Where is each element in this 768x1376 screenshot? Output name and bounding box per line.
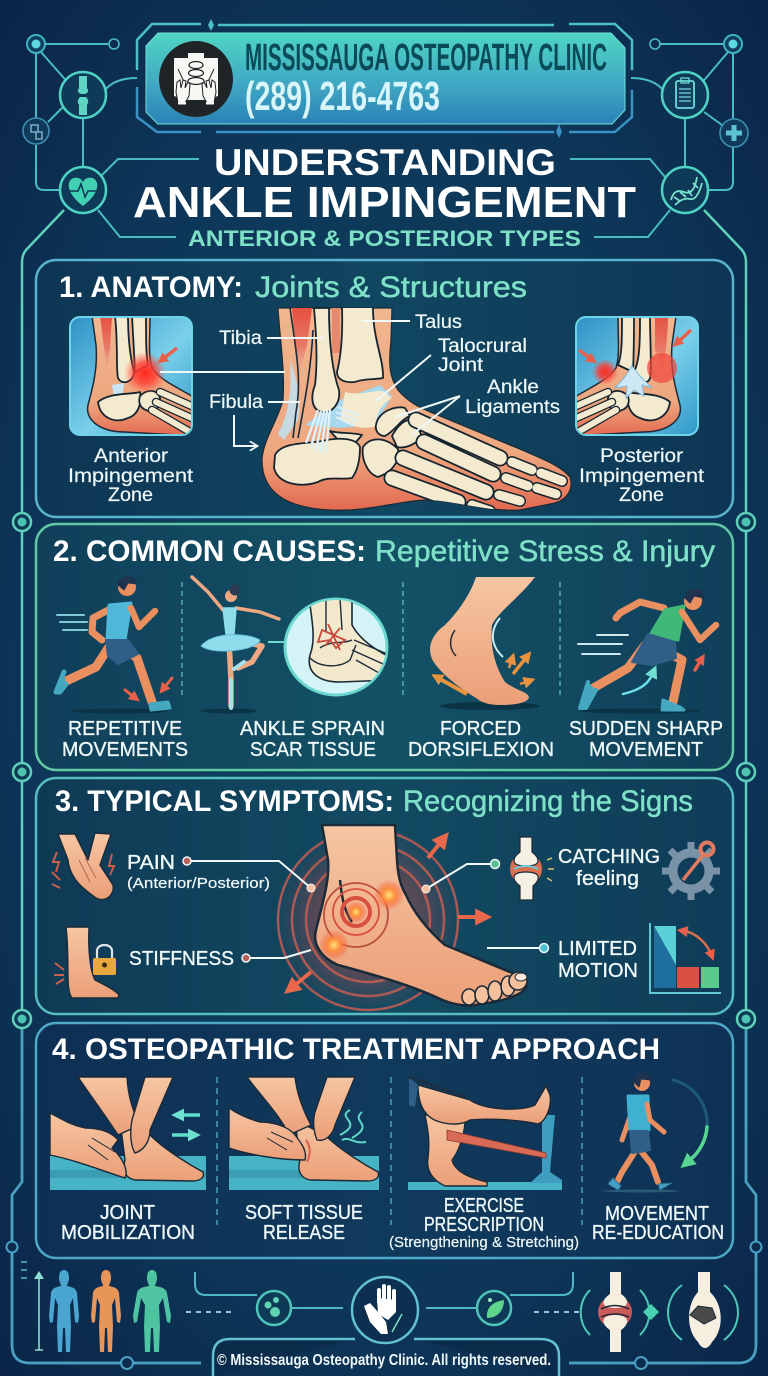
icon: small badge left <box>23 118 49 144</box>
cause labels: REPETITIVE <box>68 718 182 740</box>
motion arrows <box>440 659 526 694</box>
anatomy labels and leader lines: Talus <box>415 312 462 333</box>
icon: dna <box>662 167 708 213</box>
anatomy labels and leader lines: Talocrural <box>438 336 527 357</box>
panel frame <box>36 1023 733 1258</box>
treatment labels: RELEASE <box>263 1222 345 1244</box>
inset caption: anterior: Impingement <box>68 466 194 487</box>
treatment labels: SOFT TISSUE <box>245 1202 363 1224</box>
tibia <box>337 308 383 382</box>
panel 4: osteopathic treatment <box>36 1023 733 1258</box>
heading: Recognizing the Signs <box>403 785 693 818</box>
metatarsals and toes <box>392 420 562 511</box>
talus <box>340 391 392 428</box>
panel frame <box>36 778 733 1014</box>
gear icon <box>662 842 720 900</box>
anatomy labels and leader lines: Ligaments <box>465 397 560 418</box>
exercise illustration <box>408 1077 562 1190</box>
cause labels: MOVEMENT <box>589 739 703 761</box>
treatment labels: JOINT <box>100 1202 155 1224</box>
anatomy labels and leader lines: Tibia <box>219 328 262 349</box>
inset caption: anterior: Anterior <box>94 446 169 467</box>
inset caption: posterior: Impingement <box>579 466 705 487</box>
panel 3: typical symptoms <box>36 778 733 1014</box>
panel frame <box>36 260 733 517</box>
soft tissue release illustration <box>229 1077 379 1190</box>
limited motion label and leader <box>487 938 638 982</box>
panel 2: common causes <box>36 524 733 770</box>
cause labels <box>62 718 723 761</box>
cause labels: SUDDEN SHARP <box>569 718 723 740</box>
heading: 2. COMMON CAUSES: <box>53 535 366 568</box>
heading: 3. TYPICAL SYMPTOMS: <box>55 785 394 818</box>
healthy and worn joints <box>581 1272 738 1352</box>
heading <box>55 785 693 818</box>
header plaque <box>137 19 632 138</box>
limited motion label and leader: LIMITED <box>558 938 637 960</box>
cause labels: FORCED <box>440 718 521 740</box>
footer tab <box>213 1339 559 1376</box>
motion arc <box>493 618 503 657</box>
fibula <box>312 308 339 412</box>
treatment labels: RE-EDUCATION <box>592 1222 724 1244</box>
inset caption: anterior: Zone <box>108 485 153 506</box>
inset caption: posterior: Zone <box>619 485 664 506</box>
panel 1: anatomy <box>36 260 733 517</box>
scale arrow <box>21 1262 44 1350</box>
cause labels: MOVEMENTS <box>62 739 188 761</box>
catching label and leader: feeling <box>576 868 639 890</box>
foot in dorsiflexion <box>430 577 540 710</box>
toes <box>462 972 527 1005</box>
anatomy labels and leader lines: Joint <box>438 355 484 376</box>
inset caption: anterior <box>68 446 194 506</box>
plaque outer frame <box>137 19 632 138</box>
treatment labels <box>61 1195 724 1251</box>
stiffness icon <box>54 927 119 998</box>
anatomy labels and leader lines: Ankle <box>487 377 539 398</box>
plaque body <box>146 33 625 124</box>
motion chart <box>650 923 721 993</box>
copyright: © Mississauga Osteopathy Clinic. All rights reserved. <box>217 1352 551 1369</box>
human figure: orange <box>91 1270 121 1352</box>
arrow <box>163 348 177 359</box>
human figure: blue <box>49 1270 79 1352</box>
heading: 1. ANATOMY: <box>59 271 243 304</box>
pain label and leader: PAIN <box>127 852 175 874</box>
joint icon <box>510 837 554 900</box>
heading: Joints & Structures <box>255 271 527 304</box>
title: ANTERIOR & POSTERIOR TYPES <box>188 226 581 251</box>
anatomy labels and leader lines: Fibula <box>209 392 263 413</box>
ligament fan <box>306 409 330 453</box>
cause labels: DORSIFLEXION <box>408 739 554 761</box>
clinic logo <box>159 41 233 117</box>
icon: leaf <box>477 1291 511 1325</box>
icon: heart <box>60 167 106 213</box>
inset caption: posterior: Posterior <box>600 446 684 467</box>
treatment labels: PRESCRIPTION <box>424 1214 544 1236</box>
heading: Repetitive Stress & Injury <box>375 535 715 568</box>
joint mobilization illustration <box>50 1077 206 1190</box>
icon: clipboard <box>662 72 708 118</box>
anatomical foot <box>262 308 571 511</box>
pain icon <box>52 833 114 900</box>
sprinter <box>578 589 716 714</box>
icon: plus badge <box>720 119 748 147</box>
heading: 4. OSTEOPATHIC TREATMENT APPROACH <box>52 1033 660 1066</box>
cause labels: ANKLE SPRAIN <box>240 718 385 740</box>
footer decorations <box>21 1262 738 1376</box>
icon: knee joint <box>60 72 106 118</box>
cause labels: SCAR TISSUE <box>250 739 376 761</box>
icon: caring hands <box>352 1277 418 1343</box>
panel frame <box>36 524 733 770</box>
inset: anterior impingement <box>70 316 196 436</box>
tarsals <box>376 407 410 436</box>
dividers <box>217 1077 582 1225</box>
small tarsal <box>330 431 362 442</box>
human figure: green <box>133 1270 171 1352</box>
catching label and leader <box>422 846 660 893</box>
connectors <box>186 1311 580 1313</box>
icon: cells <box>257 1291 291 1325</box>
limited motion label and leader: MOTION <box>558 960 638 982</box>
catching label and leader: CATCHING <box>558 846 660 868</box>
phone number: (289) 216-4763 <box>245 73 440 119</box>
heading <box>53 535 715 568</box>
pain label and leader: (Anterior/Posterior) <box>127 875 270 892</box>
runner <box>56 577 172 714</box>
connector and sprain magnifier <box>268 598 392 695</box>
central painful foot <box>276 825 527 1012</box>
stiffness label and leader <box>129 948 311 970</box>
heading <box>59 271 527 304</box>
title <box>133 142 636 251</box>
stiffness label and leader: STIFFNESS <box>129 948 234 970</box>
movement arrows <box>172 1115 200 1135</box>
treatment labels: (Strengthening & Stretching) <box>389 1234 579 1251</box>
treatment labels: MOBILIZATION <box>61 1222 195 1244</box>
inset caption: posterior <box>579 446 705 506</box>
title: ANKLE IMPINGEMENT <box>133 178 636 227</box>
ballerina <box>192 577 279 714</box>
walking figure <box>603 1074 707 1192</box>
title: UNDERSTANDING <box>214 142 556 183</box>
radiating arrows <box>295 843 478 985</box>
arrows <box>579 330 691 359</box>
treatment labels: MOVEMENT <box>605 1203 709 1225</box>
pain label and leader <box>127 852 315 892</box>
dividers <box>182 582 560 696</box>
release waves <box>340 1110 366 1142</box>
inset: posterior impingement <box>572 316 698 436</box>
treatment labels: EXERCISE <box>444 1195 524 1217</box>
anatomy labels and leader lines <box>160 312 560 446</box>
calcaneus <box>274 439 360 485</box>
